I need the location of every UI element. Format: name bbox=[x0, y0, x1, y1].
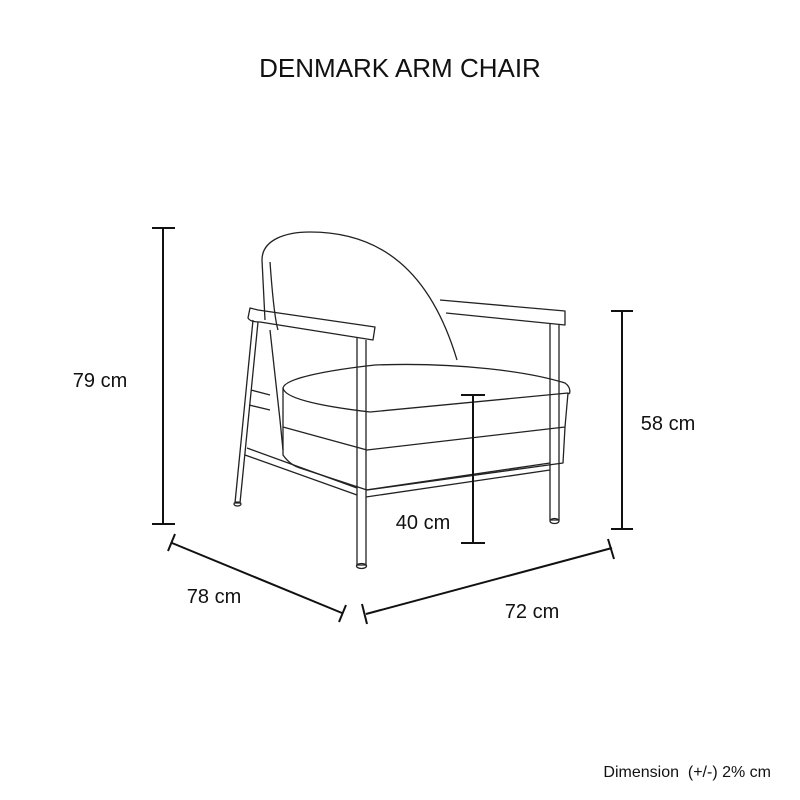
text: 79 cm bbox=[73, 370, 127, 392]
backrest bbox=[262, 232, 457, 450]
left arm and legs bbox=[234, 308, 375, 568]
right arm and leg bbox=[440, 300, 565, 524]
footnote: Dimension (+/-) 2% cm bbox=[603, 764, 771, 781]
dimension: 72 cm bbox=[362, 539, 614, 624]
chair drawing bbox=[234, 232, 570, 568]
seat cushion bbox=[283, 364, 570, 490]
dimension: 78 cm bbox=[168, 534, 346, 622]
text: 58 cm bbox=[641, 413, 695, 435]
side frame bars bbox=[245, 390, 550, 497]
text: 78 cm bbox=[187, 586, 241, 608]
dimension: 40 cm bbox=[461, 395, 485, 543]
dimension: 79 cm bbox=[152, 228, 175, 524]
title: DENMARK ARM CHAIR bbox=[259, 53, 541, 83]
text: 72 cm bbox=[505, 601, 559, 623]
text: 40 cm bbox=[396, 512, 450, 534]
dimension: 58 cm bbox=[611, 311, 633, 529]
